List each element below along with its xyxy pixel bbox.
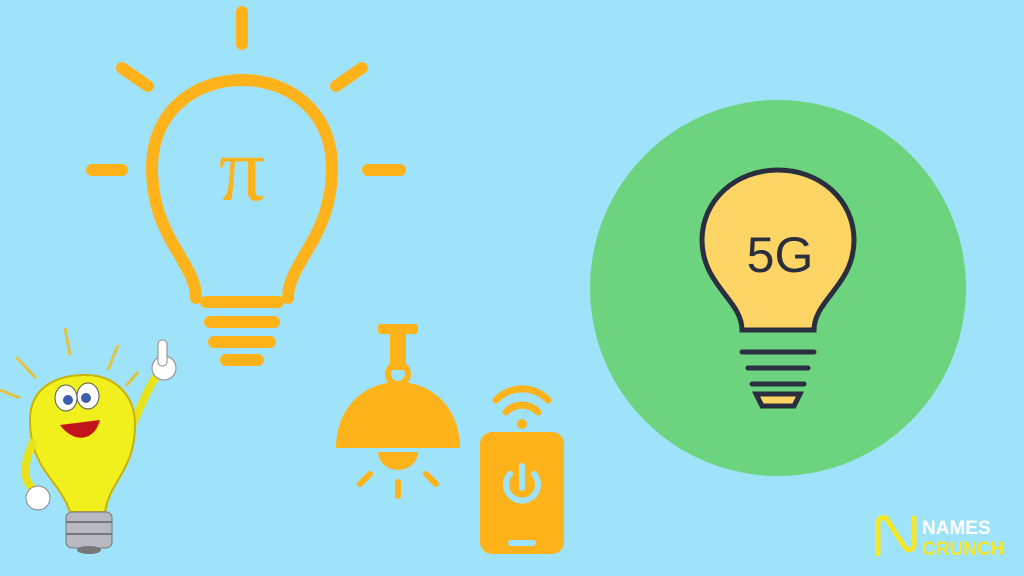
logo: names crunch <box>878 518 1004 560</box>
icon: cartoon light bulb <box>0 328 176 554</box>
icon: pendant lamp <box>336 324 460 496</box>
icon: 5G bulb <box>702 170 854 406</box>
icon: smartphone with wifi <box>480 389 564 554</box>
logo: names crunch: CRUNCH <box>922 539 1004 560</box>
icon: pi light bulb <box>92 12 400 360</box>
panel: green circle with 5G bulb <box>590 100 966 476</box>
icon: pi light bulb: π <box>219 118 265 220</box>
logo: names crunch: NAMES <box>922 518 991 539</box>
icon: 5G bulb: 5G <box>747 227 813 283</box>
